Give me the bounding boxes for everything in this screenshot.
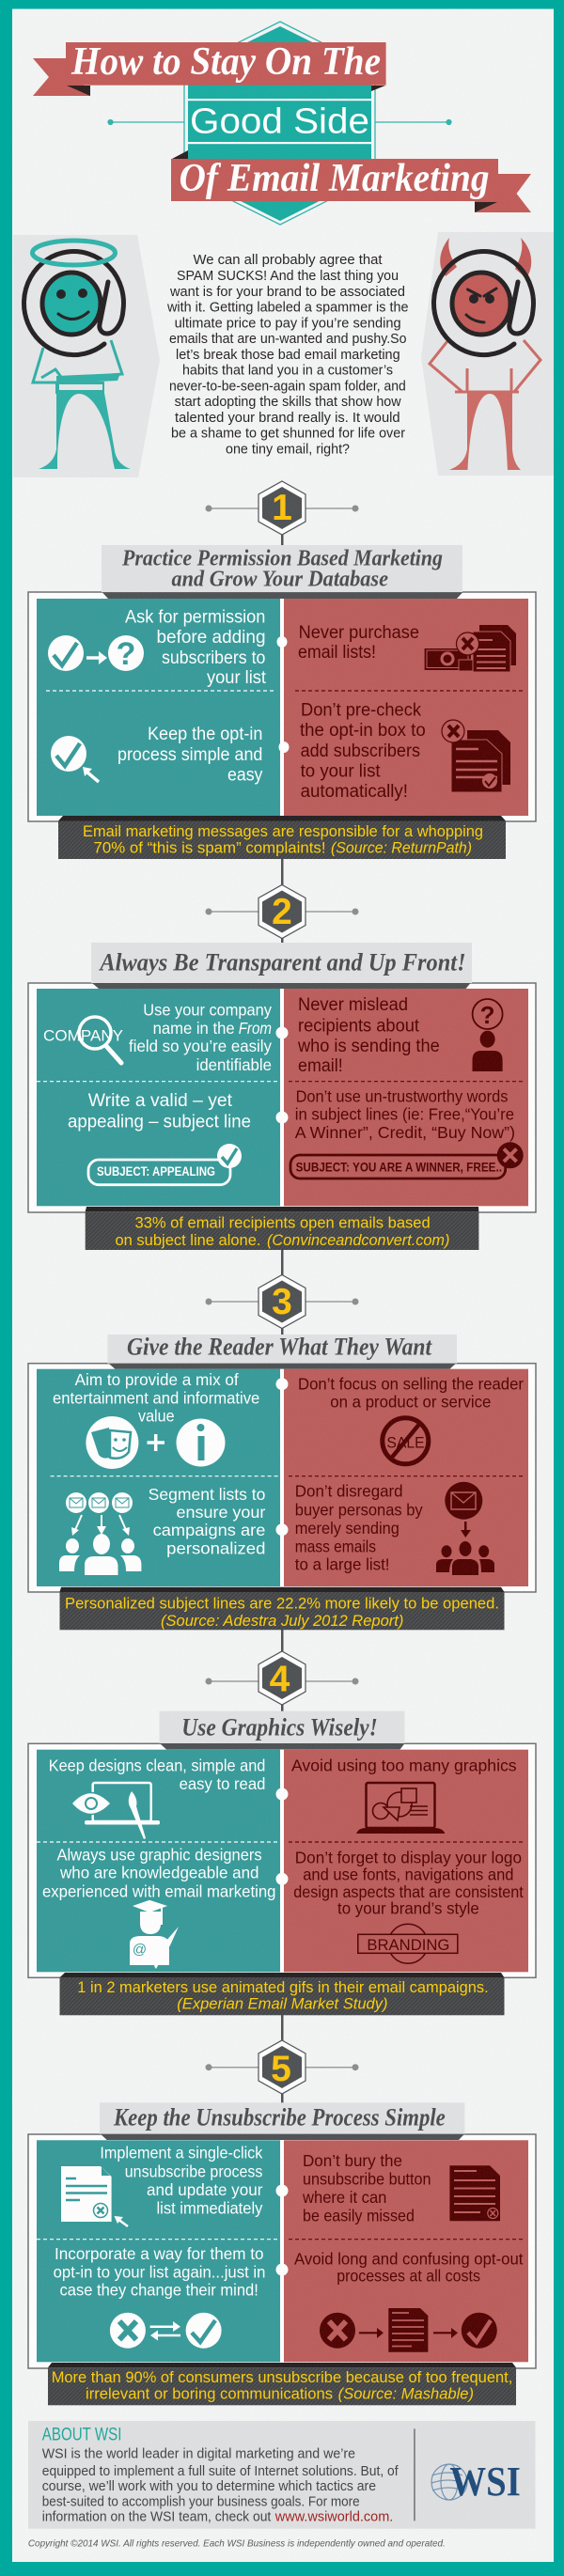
- section 3: [28, 1274, 536, 1651]
- tip: avoid confusing opt-out: processes at all costs: [337, 2267, 480, 2286]
- divider dots: [276, 636, 290, 753]
- heading plate: and Grow Your Database: [171, 568, 388, 592]
- teal do panel: [37, 989, 280, 1206]
- icon: eye monitor brush: [71, 1783, 160, 1839]
- tip: mix of entertainment: entertainment and informative: [53, 1388, 259, 1407]
- tip: segment lists: campaigns are: [153, 1521, 265, 1539]
- stat bar: 33% of email recipients open emails based: [135, 1215, 431, 1232]
- tip: clean designs: Keep designs clean, simple and: [49, 1756, 265, 1774]
- angel at sign: [24, 252, 123, 355]
- number badge 3: [205, 1274, 359, 1335]
- tip: single-click unsubscribe: Implement a single-click: [100, 2144, 263, 2162]
- tip: keep opt-in simple: [118, 725, 263, 786]
- stat bar: [60, 1973, 504, 2015]
- section 2: [28, 885, 536, 1275]
- divider line: [280, 599, 284, 816]
- teal do panel: [37, 1750, 280, 1972]
- tip: graphic designers: [42, 1845, 276, 1900]
- stat bar: (Source: Mashable): [338, 2386, 474, 2403]
- divider dots: [276, 1026, 288, 1124]
- about text: WSI is the world leader in digital marketing and we’re: [42, 2446, 355, 2461]
- title line 3: Of Email Marketing: [179, 157, 489, 200]
- intro text: talented your brand really is. It would: [175, 411, 400, 426]
- icon: no sale: [383, 1418, 429, 1464]
- about text: course, we’ll work with you to determine which tactics are: [42, 2479, 376, 2494]
- tip: use company name: field so you’re easily: [129, 1037, 272, 1055]
- tip: logo and branding: and use fonts, navigations and: [303, 1866, 513, 1884]
- tip: single-click unsubscribe: [100, 2144, 263, 2218]
- icon: laptop with shapes: [356, 1783, 445, 1834]
- intro text: let’s break those bad email marketing: [176, 348, 400, 363]
- stat bar: Personalized subject lines are 22.2% more likely to be opened.: [65, 1596, 499, 1613]
- tip: never purchase: [298, 623, 419, 663]
- number badge 5: 5: [271, 2049, 291, 2089]
- tip: valid subject line: [68, 1091, 251, 1132]
- number badge 4: [205, 1651, 359, 1711]
- stat bar: (Source: Adestra July 2012 Report): [161, 1613, 403, 1630]
- tip: single-click unsubscribe: list immediately: [156, 2199, 263, 2218]
- heading plate: [91, 943, 472, 989]
- intro text: start adopting the skills that show how: [175, 395, 401, 410]
- tip: use company name: name in the: [153, 1019, 235, 1038]
- icon: graduate designer: [130, 1900, 179, 1969]
- red dont panel: [284, 1369, 528, 1586]
- icon: check to question: [48, 635, 144, 672]
- heading plate: [160, 1711, 404, 1750]
- divider dots: [276, 1378, 288, 1536]
- intro text: habits that land you in a customer’s: [182, 363, 393, 378]
- tip: graphic designers: who are knowledgeable and: [59, 1864, 259, 1882]
- tip: logo and branding: to your brand’s style: [337, 1899, 479, 1918]
- section frame: [28, 592, 536, 821]
- icon: graduate designer: @: [133, 1942, 147, 1958]
- section 1: [28, 481, 536, 885]
- tip: ask permission: before adding: [156, 628, 265, 648]
- tip: avoid confusing opt-out: Avoid long and confusing opt-out: [294, 2249, 524, 2268]
- stat bar: on subject line alone.: [115, 1232, 261, 1249]
- icon: document with x: [442, 720, 510, 792]
- tip: never mislead: recipients about: [298, 1016, 420, 1036]
- tip: never purchase: Never purchase: [299, 623, 419, 643]
- stat bar: [48, 2363, 516, 2405]
- angel body: [33, 340, 122, 382]
- heading plate: [102, 545, 462, 599]
- tip: buyer personas: buyer personas by: [295, 1500, 423, 1519]
- icon: money and documents: [425, 625, 516, 672]
- tip: dont bury unsubscribe: Don’t bury the: [303, 2151, 402, 2170]
- tip: logo and branding: [293, 1849, 524, 1918]
- tip: segment lists: Segment lists to: [149, 1485, 265, 1504]
- tip: mix of entertainment: Aim to provide a mix of: [75, 1370, 239, 1389]
- icon: subject pill: [88, 1144, 242, 1185]
- teal do panel: [37, 1369, 280, 1586]
- about heading: ABOUT WSI: [42, 2426, 121, 2445]
- red dont panel: [284, 989, 528, 1206]
- stat bar: (Convinceandconvert.com): [267, 1232, 449, 1249]
- section frame: [28, 1743, 536, 1977]
- tip: never mislead: Never mislead: [298, 995, 408, 1015]
- tip: dont focus on selling: on a product or service: [330, 1393, 491, 1412]
- tip: dont bury unsubscribe: be easily missed: [303, 2206, 415, 2225]
- divider line: [280, 989, 284, 1206]
- wsi logo: WSI: [449, 2459, 521, 2505]
- tip: keep opt-in simple: Keep the opt-in: [148, 725, 262, 744]
- tip: valid subject line: Write a valid – yet: [88, 1091, 233, 1111]
- stat bar: irrelevant or boring communications: [86, 2386, 333, 2403]
- icon: person question: ?: [480, 1001, 495, 1029]
- tip: ask permission: subscribers to: [162, 648, 265, 668]
- devil horns: [440, 238, 531, 278]
- tip: single-click unsubscribe: and update your: [147, 2180, 263, 2199]
- tip: ask permission: [125, 608, 267, 688]
- heading plate: Keep the Unsubscribe Process Simple: [113, 2104, 446, 2131]
- stat bar: Email marketing messages are responsible for a whopping: [83, 823, 483, 840]
- tip: never mislead: email!: [298, 1056, 343, 1076]
- tip: too many graphics: Avoid using too many graphics: [291, 1756, 517, 1774]
- stat bar: [60, 1587, 504, 1630]
- tip: buyer personas: to a large list!: [295, 1555, 389, 1574]
- icon: person question: [472, 999, 503, 1071]
- tip: clean designs: [49, 1756, 265, 1793]
- tip: dont pre-check: add subscribers: [301, 742, 420, 761]
- tip: dont pre-check: automatically!: [301, 782, 408, 802]
- tip: dont pre-check: [300, 701, 426, 802]
- devil at sign: [433, 252, 533, 355]
- tip: dont bury unsubscribe: unsubscribe button: [303, 2169, 431, 2188]
- intro text: with it. Getting labeled a spammer is the: [166, 301, 409, 316]
- stat bar: [58, 816, 506, 859]
- icon: check with cursor: [51, 736, 99, 782]
- icon: branding stamp: [358, 1924, 458, 1963]
- number badge 2: [205, 885, 359, 944]
- stat bar: (Experian Email Market Study): [177, 1996, 387, 2013]
- about text: equipped to implement a full suite of Internet solutions. But, of: [42, 2464, 400, 2479]
- intro text: want is for your brand to be associated: [169, 285, 405, 300]
- tip: dont focus on selling: [298, 1374, 524, 1412]
- tip: buyer personas: Don’t disregard: [295, 1482, 403, 1501]
- heading plate: [100, 2102, 464, 2140]
- intro text: [166, 253, 409, 457]
- section 4: [28, 1651, 536, 2041]
- tip: use company name: identifiable: [196, 1055, 272, 1074]
- heading plate: Practice Permission Based Marketing: [121, 547, 443, 571]
- section frame: [28, 983, 536, 1212]
- tip: never mislead: who is sending the: [297, 1037, 440, 1056]
- tip: ask permission: your list: [207, 668, 267, 688]
- icon: check to question: ?: [117, 636, 135, 672]
- tip: untrustworthy words: [295, 1086, 515, 1142]
- tip: avoid confusing opt-out: [294, 2249, 524, 2286]
- about text: www.wsiworld.com.: [274, 2510, 393, 2525]
- tip: mix of entertainment: [53, 1370, 259, 1426]
- ribbon top: [33, 42, 386, 96]
- title line 2: Good Side: [190, 101, 369, 141]
- connector lines with dots: [108, 120, 451, 124]
- number badge 1: [205, 481, 359, 546]
- tip: dont pre-check: Don’t pre-check: [301, 701, 421, 721]
- tip: opt back in: case they change their mind!: [60, 2281, 258, 2300]
- divider line: [280, 1750, 284, 1972]
- number badge 1: 1: [272, 488, 292, 528]
- stat bar: More than 90% of consumers unsubscribe because of too frequent,: [52, 2369, 512, 2386]
- tip: segment lists: ensure your: [177, 1503, 266, 1522]
- icon: segmented audience: [59, 1492, 141, 1575]
- icon: unsubscribe document: [61, 2166, 128, 2226]
- tip: dont pre-check: the opt-in box to: [300, 721, 426, 741]
- tip: use company name: [129, 1001, 272, 1074]
- tip: opt back in: opt-in to your list again...just in: [54, 2262, 265, 2281]
- tip: mix of entertainment: value: [138, 1407, 175, 1426]
- number badge 4: 4: [270, 1660, 290, 1699]
- tip: dont bury unsubscribe: where it can: [302, 2188, 386, 2207]
- devil body: [430, 340, 540, 393]
- about panel: [28, 2421, 536, 2529]
- intro text: emails that are un-wanted and pushy.So: [169, 332, 406, 347]
- icon: x swap check: [110, 2313, 222, 2349]
- tip: dont focus on selling: Don’t focus on selling the reader: [298, 1374, 524, 1393]
- ribbon bottom: [171, 150, 531, 212]
- tip: untrustworthy words: Don’t use un-trustworthy words: [296, 1086, 509, 1105]
- icon: masks plus info: [86, 1416, 226, 1469]
- icon: subject pill: SUBJECT: APPEALING: [97, 1164, 215, 1179]
- icon: subject pill x: SUBJECT: YOU ARE A WINNER, FREE..: [296, 1160, 502, 1175]
- tip: valid subject line: appealing – subject line: [68, 1112, 251, 1132]
- tip: buyer personas: merely sending: [295, 1519, 400, 1538]
- hexagon badge: [184, 22, 375, 225]
- stat bar: 70% of “this is spam” complaints!: [94, 840, 325, 857]
- section 5: [28, 2040, 536, 2405]
- tip: dont bury unsubscribe: [302, 2151, 431, 2225]
- angel figure: [13, 235, 160, 477]
- tip: never purchase: email lists!: [298, 643, 376, 663]
- halo: [32, 241, 115, 265]
- icon: subject pill x: [290, 1142, 524, 1179]
- section frame: [28, 1364, 536, 1592]
- icon: company magnifier: [43, 1017, 123, 1063]
- devil figure: [421, 232, 554, 476]
- icon: no sale: SALE: [386, 1434, 425, 1452]
- icon: x document check flow: [320, 2308, 497, 2352]
- red dont panel: [284, 599, 528, 816]
- intro text: We can all probably agree that: [194, 253, 382, 268]
- tip: segment lists: personalized: [166, 1538, 265, 1557]
- intro text: never-to-be-seen-again spam folder, and: [169, 380, 406, 395]
- about text: best-suited to accomplish your business goals. For more: [42, 2494, 360, 2509]
- number badge 3: 3: [272, 1282, 292, 1322]
- divider dots: [276, 1788, 288, 1885]
- tip: untrustworthy words: in subject lines (ie: Free,“You’re: [295, 1105, 514, 1124]
- number badge 5: [205, 2040, 359, 2103]
- tip: never mislead: [297, 995, 440, 1076]
- tip: graphic designers: Always use graphic designers: [56, 1845, 262, 1864]
- heading plate: Give the Reader What They Want: [127, 1334, 432, 1361]
- tip: keep opt-in simple: easy: [227, 766, 263, 786]
- tip: use company name: Use your company: [143, 1001, 272, 1020]
- section frame: [28, 2134, 536, 2368]
- tip: untrustworthy words: A Winner”, Credit, “Buy Now”): [295, 1123, 515, 1142]
- title line 1: How to Stay On The: [70, 40, 381, 84]
- tip: opt back in: [54, 2244, 265, 2300]
- red dont panel: [284, 2140, 528, 2362]
- intro text: one tiny email, right?: [226, 442, 350, 457]
- tip: ask permission: Ask for permission: [125, 608, 265, 628]
- heading plate: Use Graphics Wisely!: [181, 1714, 378, 1741]
- icon: mass email to group: [436, 1482, 494, 1575]
- icon: branding stamp: BRANDING: [367, 1936, 449, 1954]
- tip: use company name: From: [239, 1019, 272, 1038]
- about text: [42, 2446, 400, 2525]
- tip: logo and branding: Don’t forget to display your logo: [295, 1849, 522, 1867]
- about text: information on the WSI team, check out: [42, 2510, 271, 2525]
- tip: buyer personas: [295, 1482, 423, 1574]
- icon: buried document: [449, 2165, 500, 2221]
- stat bar: [86, 1207, 478, 1250]
- tip: buyer personas: mass emails: [295, 1537, 376, 1555]
- red dont panel: [284, 1750, 528, 1972]
- tip: segment lists: [149, 1485, 266, 1557]
- tip: graphic designers: experienced with email marketing: [42, 1881, 276, 1900]
- intro text: be a shame to get shunned for life over: [171, 427, 405, 442]
- tip: dont pre-check: to your list: [301, 762, 381, 782]
- heading plate: Always Be Transparent and Up Front!: [99, 949, 466, 976]
- tip: opt back in: Incorporate a way for them to: [55, 2244, 263, 2263]
- stat bar: (Source: ReturnPath): [331, 840, 472, 857]
- copyright: Copyright ©2014 WSI. All rights reserved. Each WSI Business is independently owned and operated.: [28, 2537, 446, 2549]
- icon: company magnifier: COMPANY: [43, 1027, 123, 1045]
- number badge 2: 2: [272, 892, 292, 932]
- intro text: SPAM SUCKS! And the last thing you: [177, 269, 399, 284]
- title banner: [33, 22, 531, 225]
- tip: keep opt-in simple: process simple and: [118, 745, 262, 765]
- intro text: ultimate price to pay if you’re sending: [175, 316, 401, 331]
- teal do panel: [37, 2140, 280, 2362]
- divider line: [280, 2140, 284, 2362]
- tip: logo and branding: design aspects that are consistent: [293, 1882, 524, 1901]
- divider dots: [276, 2184, 288, 2276]
- tip: clean designs: easy to read: [180, 1774, 265, 1793]
- teal do panel: [37, 599, 280, 816]
- tip: single-click unsubscribe: unsubscribe process: [125, 2162, 263, 2181]
- stat bar: 1 in 2 marketers use animated gifs in their email campaigns.: [77, 1979, 489, 1996]
- divider line: [280, 1369, 284, 1586]
